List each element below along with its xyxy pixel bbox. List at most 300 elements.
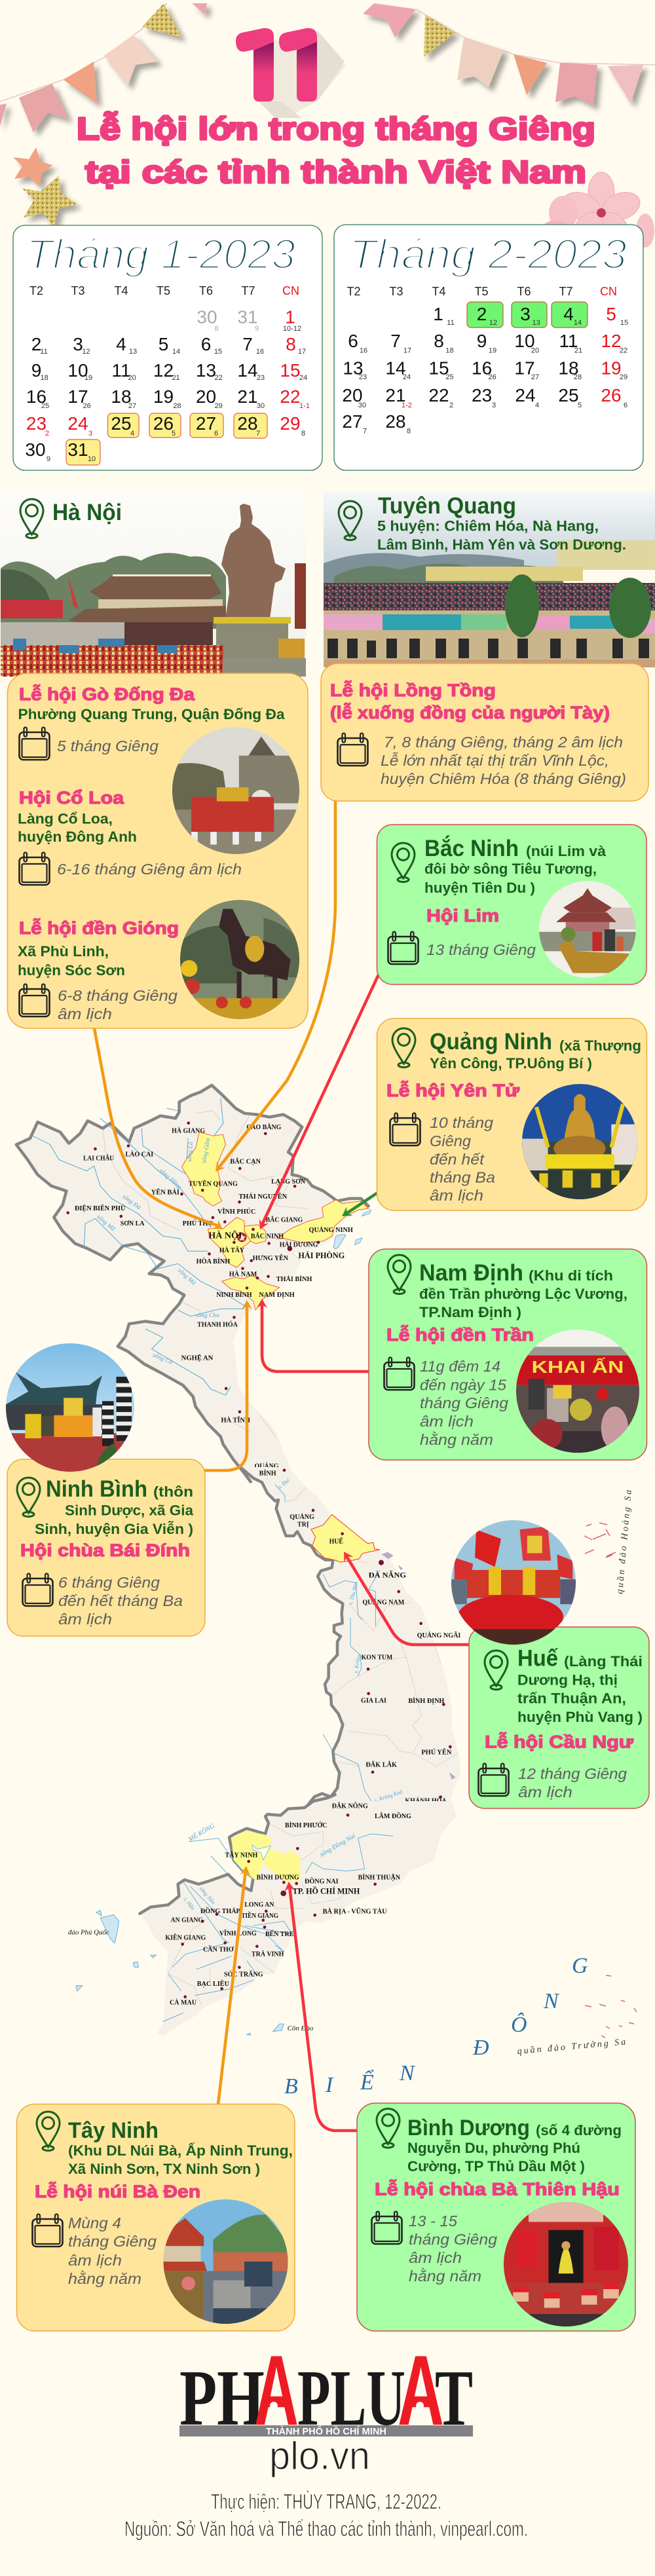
label: Biển Đông: Đ bbox=[472, 2036, 489, 2060]
heading: Hà Nội: Hà Nội bbox=[52, 500, 122, 525]
heading: Tuyên Quang: 5 huyện: Chiêm Hóa, Nà Hang, bbox=[377, 517, 599, 534]
festival: Gò Đống Đa: Lễ hội Gò Đống Đa bbox=[19, 684, 195, 704]
map labels central: PHÚ YÊN bbox=[421, 1748, 452, 1756]
weekday row: T3 bbox=[389, 285, 403, 298]
festival: Gò Đống Đa: Phường Quang Trung, Quận Đống Đa bbox=[18, 706, 285, 722]
day numbers: 17 bbox=[514, 358, 535, 379]
day numbers: 30 bbox=[25, 439, 46, 460]
label: Biển Đông: I bbox=[325, 2073, 334, 2097]
festival: núi Bà Đen: hằng năm bbox=[68, 2270, 141, 2287]
panel: Huế bbox=[451, 1520, 649, 1808]
weekday row: T2 bbox=[29, 284, 43, 297]
festival: Lồng Tồng: huyện Chiêm Hóa (8 tháng Giêng) bbox=[381, 770, 626, 787]
panel: Quảng Ninh bbox=[377, 1018, 647, 1210]
map labels south: ĐỒNG NAI bbox=[305, 1876, 339, 1885]
festival: đền Gióng: 6-8 tháng Giêng bbox=[58, 987, 178, 1004]
map labels north: HÀ NỘI bbox=[208, 1229, 242, 1240]
festival: Cầu Ngư: Lễ hội Cầu Ngư bbox=[485, 1732, 633, 1751]
day numbers: 28 bbox=[237, 413, 258, 434]
heading: Huế: trấn Thuận An, bbox=[517, 1690, 626, 1707]
festival: Bái Đính bbox=[20, 1540, 190, 1628]
heading: Bắc Ninh bbox=[424, 835, 607, 896]
festival: Hội Lim: 13 tháng Giêng bbox=[426, 941, 536, 958]
festival: Gò Đống Đa bbox=[18, 684, 285, 760]
map labels south: BẠC LIÊU bbox=[197, 1980, 230, 1988]
day numbers: 25 bbox=[111, 413, 132, 434]
lunar dates: 16 bbox=[256, 348, 264, 356]
day numbers: 16 bbox=[26, 386, 47, 407]
map labels north: BẮC GIANG bbox=[266, 1215, 303, 1223]
map labels north: sông Đà bbox=[121, 1193, 142, 1211]
map labels north: LÀO CAI bbox=[125, 1151, 153, 1159]
map labels central: s. Krông Knô bbox=[373, 1789, 403, 1804]
festival: Yên Tử: Giêng bbox=[430, 1132, 471, 1149]
map: Tây Ninh and Bình Dương highlighted bbox=[231, 1831, 301, 1882]
day numbers: 18 bbox=[558, 358, 579, 379]
map labels north: HÀ TÂY bbox=[219, 1246, 245, 1254]
map labels south: MÊ KÔNG bbox=[187, 1822, 216, 1844]
logo wordmark: PH bbox=[179, 2354, 265, 2442]
festival: Bái Đính: đến hết tháng Ba bbox=[58, 1592, 183, 1609]
map labels central: HUẾ bbox=[329, 1537, 343, 1546]
festival: Yên Tử: tháng Ba bbox=[430, 1168, 495, 1185]
photo: Lễ hội Cầu Ngư bbox=[451, 1520, 576, 1645]
day numbers: 24 bbox=[515, 385, 536, 405]
label: Hoàng Sa islands: quần đảo Hoàng Sa bbox=[615, 1487, 634, 1594]
lunar dates: 14 bbox=[574, 319, 582, 327]
map labels north: THÁI NGUYÊN bbox=[238, 1193, 288, 1201]
map dots bbox=[181, 1814, 377, 1998]
website: plo.vn bbox=[269, 2434, 370, 2478]
festival: Cầu Ngư bbox=[478, 1732, 633, 1801]
day numbers: 7 bbox=[390, 331, 401, 351]
day numbers: 18 bbox=[111, 386, 132, 407]
weekday row: T5 bbox=[157, 284, 170, 297]
festival: đền Gióng bbox=[18, 918, 179, 1022]
day numbers: 11 bbox=[559, 331, 578, 351]
lunar dates: 19 bbox=[84, 374, 92, 382]
day numbers: 7 bbox=[242, 334, 253, 354]
lunar dates: 25 bbox=[41, 402, 49, 410]
lunar dates: 22 bbox=[215, 374, 223, 382]
map labels central: s. Krông bbox=[352, 1654, 362, 1673]
icon: blossom bbox=[544, 172, 654, 252]
weekday row: CN bbox=[600, 285, 617, 298]
lunar dates: 28 bbox=[574, 373, 582, 381]
lunar dates: 11 bbox=[447, 319, 455, 327]
map labels south: TP. HỒ CHÍ MINH bbox=[293, 1886, 360, 1895]
lunar dates: 29 bbox=[215, 402, 223, 410]
day numbers: 5 bbox=[159, 334, 168, 354]
map labels south: BÌNH DƯƠNG bbox=[257, 1873, 299, 1881]
festival: núi Bà Đen: Lễ hội núi Bà Đen bbox=[35, 2181, 200, 2201]
festival: đền Trần: 11g đêm 14 bbox=[420, 1358, 500, 1375]
arrow: Bắc Ninh bbox=[259, 976, 378, 1229]
weekday row: T4 bbox=[114, 284, 128, 297]
day numbers: 9 bbox=[477, 331, 487, 351]
festival: chùa Bà Thiên Hậu: hằng năm bbox=[409, 2268, 481, 2285]
heading: Bắc Ninh: Bắc Ninh bbox=[424, 835, 519, 861]
heading: Huế: huyện Phù Vang ) bbox=[517, 1709, 643, 1725]
map labels central: BÌNH ĐỊNH bbox=[408, 1697, 444, 1705]
lunar dates: 30 bbox=[257, 402, 265, 410]
map: Huế highlighted bbox=[311, 1514, 380, 1562]
lunar dates: 1-1 bbox=[299, 402, 310, 410]
lunar dates: 6 bbox=[624, 401, 627, 409]
map labels north: QUẢNG NINH bbox=[309, 1226, 353, 1234]
lunar dates: 24 bbox=[403, 373, 411, 381]
arrow: Huế bbox=[344, 1552, 469, 1645]
festival: Hội Cổ Loa bbox=[18, 788, 242, 885]
heading: Nam Định: (Khu di tích bbox=[529, 1267, 613, 1284]
weekday row bbox=[29, 284, 299, 297]
day numbers: 10 bbox=[514, 331, 535, 351]
credits: Thực hiện: THÙY TRANG, 12-2022. bbox=[211, 2490, 441, 2514]
panel: Bình Dương bbox=[357, 2103, 635, 2331]
festival: chùa Bà Thiên Hậu: âm lịch bbox=[409, 2249, 462, 2266]
day numbers: 20 bbox=[196, 386, 216, 407]
photo: Lồng Tồng festival ground bbox=[324, 491, 655, 667]
map labels north: TUYÊN QUANG bbox=[189, 1180, 238, 1188]
map labels south: Côn Đảo bbox=[288, 2025, 313, 2032]
lunar dates: 9 bbox=[47, 455, 50, 463]
lunar dates: 8 bbox=[407, 427, 411, 435]
heading: Bắc Ninh: huyện Tiên Du ) bbox=[424, 880, 535, 896]
day numbers: 17 bbox=[67, 386, 88, 407]
map labels north bbox=[75, 1123, 353, 1470]
weekday row: T4 bbox=[432, 285, 446, 298]
day numbers: 23 bbox=[472, 385, 492, 405]
map labels south: SÓC TRĂNG bbox=[224, 1971, 263, 1979]
heading: Bắc Ninh: (núi Lim và bbox=[526, 843, 607, 859]
label: Hoàng Sa islands bbox=[584, 1487, 634, 1594]
lunar dates: 19 bbox=[489, 347, 496, 355]
lunar dates: 4 bbox=[535, 401, 539, 409]
lunar dates: 12 bbox=[489, 319, 497, 327]
day numbers: 31 bbox=[67, 439, 88, 460]
weekday row: T6 bbox=[517, 285, 531, 298]
map labels north: VĨNH PHÚC bbox=[217, 1208, 255, 1216]
map labels north: HÒA BÌNH bbox=[196, 1258, 230, 1265]
day numbers: 27 bbox=[342, 411, 363, 432]
logo wordmark: PLU bbox=[297, 2354, 405, 2442]
heading: Nam Định: đền Trần phường Lộc Vương, bbox=[419, 1286, 627, 1302]
lunar dates: 2 bbox=[449, 401, 453, 409]
heading: Huế: Huế bbox=[517, 1645, 558, 1671]
map labels north: HẢI PHÒNG bbox=[298, 1251, 345, 1260]
festival: đền Trần: đến ngày 15 bbox=[420, 1377, 506, 1394]
icon: pin bbox=[17, 1478, 40, 1517]
map labels north: NAM ĐỊNH bbox=[259, 1292, 295, 1299]
day numbers: 6 bbox=[201, 334, 211, 354]
lunar dates: 18 bbox=[445, 347, 454, 355]
festival: núi Bà Đen bbox=[33, 2181, 200, 2287]
festival: Hội Cổ Loa: huyện Đông Anh bbox=[18, 829, 137, 845]
festival: Hội Lim bbox=[388, 906, 536, 964]
panel: Bắc Ninh bbox=[377, 825, 646, 984]
map labels south: đảo Phú Quốc bbox=[68, 1929, 109, 1936]
lunar dates: 8 bbox=[214, 325, 219, 333]
heading: Ninh Bình bbox=[35, 1476, 194, 1537]
lunar dates: 25 bbox=[445, 373, 454, 381]
day numbers: 21 bbox=[385, 385, 406, 405]
heading: Tuyên Quang: Lâm Bình, Hàm Yên và Sơn Dương. bbox=[377, 536, 626, 553]
day numbers: 1 bbox=[285, 307, 295, 327]
festival: đền Trần: Lễ hội đền Trần bbox=[386, 1324, 534, 1345]
festival: núi Bà Đen: tháng Giêng bbox=[68, 2233, 157, 2250]
map labels north: sông Mã bbox=[95, 1213, 117, 1233]
map dots bbox=[66, 1121, 320, 1472]
weekday row: CN bbox=[282, 284, 299, 297]
festival: Cầu Ngư: 12 tháng Giêng bbox=[518, 1765, 627, 1782]
day numbers: 16 bbox=[472, 358, 492, 379]
icon: pin bbox=[377, 2109, 400, 2148]
icon: pin bbox=[37, 2112, 60, 2151]
lunar dates: 22 bbox=[620, 347, 627, 355]
map dots bbox=[283, 1468, 452, 1799]
icon: pin bbox=[392, 843, 415, 882]
map labels north: sông Chu bbox=[196, 1312, 219, 1319]
heading: Tây Ninh: (Khu DL Núi Bà, Ấp Ninh Trung, bbox=[68, 2142, 293, 2159]
lunar dates: 26 bbox=[488, 373, 496, 381]
lunar dates: 10 bbox=[88, 455, 96, 463]
heading: Huế bbox=[517, 1645, 643, 1725]
map labels north: CAO BẰNG bbox=[246, 1123, 281, 1131]
festival: Lồng Tồng: 7, 8 tháng Giêng, tháng 2 âm lịch bbox=[384, 734, 623, 751]
heading: Bình Dương: (số 4 đường bbox=[536, 2122, 622, 2138]
photo: Hội Lim bbox=[539, 881, 636, 978]
map labels central: KON TUM bbox=[362, 1654, 393, 1661]
map labels north: HẢI DƯƠNG bbox=[280, 1241, 318, 1249]
lunar dates: 27 bbox=[128, 402, 136, 410]
festival: Yên Tử: đến hết bbox=[430, 1151, 485, 1168]
map labels north: HÀ NAM bbox=[229, 1271, 257, 1279]
map labels north: NINH BÌNH bbox=[216, 1291, 252, 1299]
lunar dates: 6 bbox=[214, 430, 218, 438]
day numbers: 25 bbox=[558, 385, 579, 405]
day numbers: 19 bbox=[153, 386, 174, 407]
festival: Lồng Tồng: Lễ hội Lồng Tồng bbox=[330, 680, 496, 700]
map: northern Vietnam bbox=[16, 1085, 371, 1482]
panel: Hà Nội bbox=[1, 491, 308, 1028]
day numbers: 20 bbox=[342, 385, 363, 405]
photo: Đống Đa statue and temple bbox=[1, 491, 306, 677]
map labels north: sông Mã bbox=[176, 1267, 197, 1287]
map labels north: sông Hồng bbox=[158, 1167, 183, 1191]
heading: Quảng Ninh: Yên Công, TP.Uông Bí ) bbox=[430, 1055, 592, 1072]
map labels north: HƯNG YÊN bbox=[253, 1254, 289, 1262]
heading: Tuyên Quang bbox=[377, 493, 626, 553]
lunar dates: 28 bbox=[173, 402, 181, 410]
big number 11 bbox=[236, 28, 346, 118]
label: Biển Đông: N bbox=[399, 2061, 416, 2085]
panel: Tây Ninh bbox=[17, 2104, 295, 2331]
heading: Quảng Ninh: (xã Thượng bbox=[559, 1037, 641, 1054]
arrow: Ninh Bình bbox=[204, 1300, 252, 1470]
festival: chùa Bà Thiên Hậu: 13 - 15 bbox=[409, 2212, 457, 2230]
lunar dates: 27 bbox=[531, 373, 539, 381]
lunar dates: 20 bbox=[128, 374, 136, 382]
heading: Ninh Bình: Sinh, huyện Gia Viễn ) bbox=[35, 1521, 193, 1537]
title: tại các tỉnh thành Việt Nam bbox=[85, 155, 586, 190]
day numbers: 15 bbox=[280, 360, 301, 381]
map labels north: BẮC CẠN bbox=[230, 1157, 261, 1165]
day numbers: 29 bbox=[280, 413, 301, 434]
map labels north: THANH HÓA bbox=[197, 1320, 238, 1328]
festival: Yên Tử: âm lịch bbox=[430, 1187, 483, 1204]
heading: Bắc Ninh: đôi bờ sông Tiêu Tương, bbox=[424, 861, 597, 877]
heading: Huế: Dương Hạ, thị bbox=[517, 1671, 618, 1689]
festival: đền Trần: âm lịch bbox=[420, 1413, 474, 1430]
day numbers: 5 bbox=[606, 304, 616, 324]
heading: Ninh Bình: (thôn bbox=[153, 1484, 193, 1500]
map: central Vietnam bbox=[240, 1467, 460, 1816]
heading: Ninh Bình: Sinh Dược, xã Gia bbox=[65, 1503, 194, 1518]
icon: stars bbox=[13, 147, 77, 228]
lunar dates: 7 bbox=[363, 427, 367, 435]
label: Biển Đông: Ể bbox=[360, 2070, 374, 2095]
lunar dates: 5 bbox=[578, 401, 582, 409]
panel: Nam Định bbox=[369, 1249, 647, 1460]
capital marker bbox=[238, 1233, 246, 1242]
label: Trường Sa islands bbox=[517, 1975, 637, 2057]
weekday row: T2 bbox=[346, 285, 361, 298]
map labels south: s. Hậu bbox=[182, 1896, 196, 1911]
festival: đền Gióng: âm lịch bbox=[58, 1005, 112, 1022]
map labels north: PHÚ THỌ bbox=[183, 1220, 213, 1227]
lunar dates: 17 bbox=[298, 348, 306, 356]
lunar dates: 12 bbox=[82, 348, 90, 356]
map labels north: BẮC NINH bbox=[251, 1231, 284, 1240]
lunar dates: 13 bbox=[532, 319, 540, 327]
map labels north: YÊN BÁI bbox=[151, 1189, 179, 1197]
photo: đền Trần bbox=[516, 1330, 639, 1453]
day numbers: 4 bbox=[563, 304, 574, 324]
map labels south: ĐẮK NÔNG bbox=[332, 1802, 368, 1810]
arrow: Hà Nội bbox=[94, 1025, 223, 1229]
map labels north: THÁI BÌNH bbox=[276, 1275, 312, 1283]
day numbers: 3 bbox=[73, 334, 83, 354]
lunar dates: 29 bbox=[620, 373, 627, 381]
lunar dates bbox=[358, 319, 628, 435]
lunar dates: 4 bbox=[130, 430, 134, 438]
icon: pin bbox=[20, 499, 43, 538]
calendar: February 2023 bbox=[334, 225, 643, 470]
heading: Nam Định: Nam Định bbox=[419, 1260, 523, 1286]
map: southern Vietnam bbox=[68, 1795, 457, 2036]
day numbers: 13 bbox=[196, 360, 216, 381]
festival: núi Bà Đen: Mùng 4 bbox=[68, 2214, 121, 2231]
festival: Bái Đính: 6 tháng Giêng bbox=[58, 1574, 160, 1591]
heading: Bình Dương: Nguyễn Du, phường Phú bbox=[407, 2140, 580, 2156]
map labels south: KIÊN GIANG bbox=[165, 1933, 206, 1941]
weekday row: T3 bbox=[71, 284, 85, 297]
map labels central: QUẢNG NAM bbox=[362, 1598, 405, 1606]
map labels north: ĐIỆN BIÊN PHỦ bbox=[75, 1204, 126, 1212]
day numbers: 30 bbox=[196, 307, 217, 327]
logo wordmark: A bbox=[398, 2335, 444, 2446]
photo: chùa Bái Đính bbox=[6, 1343, 134, 1472]
label: Trường Sa islands: quần đảo Trường Sa bbox=[517, 2037, 628, 2057]
day numbers bbox=[25, 307, 301, 460]
lunar dates: 5 bbox=[172, 430, 176, 438]
lunar dates: 11 bbox=[40, 348, 48, 356]
day numbers: 22 bbox=[428, 385, 449, 405]
festival: Hội Cổ Loa: 6-16 tháng Giêng âm lịch bbox=[57, 861, 242, 878]
map labels north: sông Cả bbox=[152, 1352, 174, 1366]
day numbers: 28 bbox=[385, 411, 406, 432]
festival: chùa Bà Thiên Hậu: Lễ hội chùa Bà Thiên Hậu bbox=[375, 2178, 620, 2199]
title bbox=[77, 111, 595, 190]
arrow: Nam Định bbox=[257, 1299, 368, 1372]
map labels central: ĐẮK LẮK bbox=[365, 1761, 397, 1769]
festival: đền Gióng: Lễ hội đền Gióng bbox=[19, 918, 179, 938]
calendar: January 2023 bbox=[13, 225, 322, 470]
weekday row bbox=[346, 285, 617, 298]
weekday row: T5 bbox=[474, 285, 489, 298]
day numbers: 14 bbox=[237, 360, 258, 381]
panel: Tuyên Quang bbox=[321, 491, 655, 801]
arrows from panels to provinces bbox=[94, 801, 469, 2131]
credits bbox=[124, 2490, 528, 2541]
lunar dates: 16 bbox=[360, 347, 367, 355]
heading: Bình Dương: Cường, TP Thủ Dầu Một ) bbox=[407, 2158, 585, 2175]
day numbers: 4 bbox=[116, 334, 126, 354]
day numbers bbox=[342, 304, 622, 432]
lunar dates: 30 bbox=[358, 401, 366, 409]
festival: Lồng Tồng: Lễ lớn nhất tại thị trấn Vĩnh Lộc, bbox=[381, 751, 609, 769]
lunar dates: 14 bbox=[172, 348, 180, 356]
logo wordmark: A bbox=[254, 2335, 299, 2446]
lunar dates: 3 bbox=[88, 430, 92, 438]
day numbers: 14 bbox=[385, 358, 406, 379]
day numbers: 31 bbox=[237, 307, 258, 327]
highlighted festival days bbox=[66, 413, 267, 465]
photo: Cổ Loa bbox=[172, 727, 299, 854]
day numbers: 13 bbox=[343, 358, 364, 379]
day numbers: 1 bbox=[433, 304, 443, 324]
arrow: Quảng Ninh bbox=[342, 1193, 377, 1216]
heading: Tây Ninh: Xã Ninh Sơn, TX Ninh Sơn ) bbox=[68, 2161, 260, 2177]
festival: chùa Bà Thiên Hậu bbox=[372, 2178, 620, 2285]
lunar dates: 18 bbox=[40, 374, 48, 382]
panel: Ninh Bình bbox=[6, 1343, 205, 1636]
day numbers: 6 bbox=[348, 331, 358, 351]
map labels central: TRỊ bbox=[297, 1521, 309, 1529]
map: highlighted provinces north bbox=[181, 1132, 369, 1310]
map labels north: LẠNG SƠN bbox=[271, 1178, 306, 1185]
lunar dates: 1-2 bbox=[402, 401, 412, 409]
day numbers: 15 bbox=[428, 358, 449, 379]
map labels north: sông Gâm bbox=[200, 1137, 212, 1164]
festival: Yên Tử: 10 tháng bbox=[430, 1114, 493, 1131]
day numbers: 11 bbox=[111, 360, 131, 381]
lunar dates: 8 bbox=[301, 430, 305, 438]
festival: đền Gióng: huyện Sóc Sơn bbox=[18, 962, 125, 979]
label: Biển Đông bbox=[284, 1954, 588, 2099]
label: Biển Đông: Ô bbox=[511, 2012, 527, 2037]
map labels south: BÀ RỊA - VŨNG TÀU bbox=[323, 1907, 387, 1915]
map labels south: TRÀ VINH bbox=[252, 1951, 284, 1958]
arrow: Tuyên Quang bbox=[215, 801, 335, 1172]
day numbers: 22 bbox=[280, 386, 301, 407]
map labels central: ĐÀ NẴNG bbox=[369, 1569, 406, 1579]
lunar dates: 23 bbox=[359, 373, 367, 381]
map labels south: LÂM ĐỒNG bbox=[375, 1812, 411, 1820]
heading: Quảng Ninh: Quảng Ninh bbox=[430, 1029, 552, 1055]
lunar dates: 21 bbox=[172, 374, 180, 382]
map labels south: TÂY NINH bbox=[225, 1852, 257, 1859]
